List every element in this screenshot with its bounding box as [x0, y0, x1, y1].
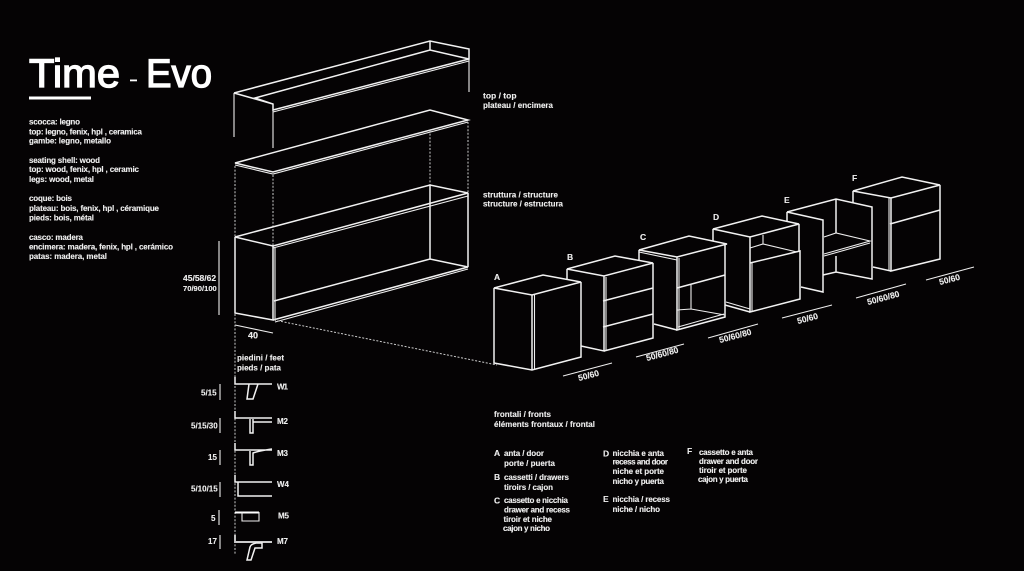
- module A: door: A: [494, 272, 500, 282]
- legend: D niche and door: nicchia e anta: [612, 449, 665, 458]
- legend: B drawers: [494, 472, 570, 492]
- module width dimensions: 50/60/80: [645, 345, 680, 363]
- legend: D niche and door: recess and door: [612, 458, 668, 466]
- module D: niche and door: [713, 212, 800, 312]
- dimension: depth: [235, 325, 273, 340]
- module width dimensions: [563, 267, 974, 383]
- foot W4: [191, 475, 290, 497]
- legend: C drawer and niche: cassetto e nicchia: [504, 496, 569, 505]
- module B: drawers: B: [567, 252, 573, 262]
- section labels: top and structure: structure / estructura: [483, 200, 564, 208]
- section labels: top and structure: struttura / structure: [483, 190, 559, 200]
- legend: E niche: nicchia / recess: [612, 495, 671, 504]
- text block: materials: top: wood, fenix, hpl , ceramic: [29, 165, 140, 174]
- foot W1: 5/15: [201, 388, 217, 398]
- foot W1: [201, 377, 289, 400]
- text block: materials: scocca: legno: [29, 118, 80, 126]
- heading: feet: pieds / pata: [237, 364, 282, 372]
- legend: D niche and door: nicho y puerta: [612, 477, 665, 486]
- module D: niche and door: D: [713, 212, 719, 222]
- heading: fronts: éléments frontaux / frontal: [494, 420, 595, 429]
- module E: niche: E: [784, 195, 790, 205]
- module C: drawer and niche: C: [640, 232, 646, 242]
- foot M7: [208, 535, 289, 560]
- legend: A door: anta / door: [504, 449, 544, 458]
- foot W4: W4: [277, 480, 290, 489]
- module width dimensions: 50/60/80: [718, 327, 753, 345]
- text block: materials: coque: bois: [29, 194, 73, 203]
- title: Time: [29, 52, 120, 96]
- legend: C drawer and niche: drawer and recess: [504, 506, 571, 514]
- legend: D niche and door: D: [603, 448, 609, 458]
- legend: C drawer and niche: C: [494, 496, 500, 506]
- text block: materials: seating shell: wood: [29, 156, 100, 165]
- legend: E niche: niche / nicho: [612, 505, 660, 514]
- text block: materials: [29, 118, 173, 261]
- module E: niche: [784, 195, 872, 292]
- module F: drawer and door: [852, 173, 940, 271]
- section labels: top and structure: top / top: [483, 90, 517, 100]
- module C: drawer and niche: [639, 232, 727, 330]
- foot W1: W1: [277, 382, 289, 392]
- heading: fronts: [494, 410, 595, 429]
- module width dimensions: 50/60: [796, 311, 819, 326]
- legend: B drawers: tiroirs / cajon: [504, 483, 553, 492]
- legend: B drawers: B: [494, 472, 500, 482]
- dashed guide lines: [235, 314, 497, 555]
- exploded unit: structure: [235, 110, 468, 322]
- section labels: top and structure: [483, 90, 564, 208]
- heading: feet: [237, 354, 284, 372]
- text block: materials: gambe: legno, metallo: [29, 136, 111, 146]
- section labels: top and structure: plateau / encimera: [483, 101, 554, 110]
- legend: A door: porte / puerta: [504, 459, 556, 468]
- foot M5: [211, 510, 290, 525]
- foot M7: M7: [277, 537, 289, 546]
- text block: materials: plateau: bois, fenix, hpl , céramique: [29, 204, 160, 213]
- legend: F drawer and door: cajon y puerta: [698, 475, 749, 484]
- foot M2: M2: [277, 417, 289, 426]
- foot M3: [208, 443, 289, 465]
- foot M2: [191, 411, 289, 433]
- foot M5: 5: [211, 514, 216, 523]
- foot W4: 5/10/15: [191, 484, 218, 494]
- text block: materials: pieds: bois, métal: [29, 214, 94, 222]
- module F: drawer and door: F: [852, 173, 857, 183]
- text block: materials: encimera: madera, fenix, hpl , cerámico: [29, 242, 173, 252]
- legend: C drawer and niche: cajon y nicho: [503, 524, 550, 533]
- text block: materials: casco: madera: [29, 233, 84, 242]
- heading: fronts: frontali / fronts: [494, 410, 552, 419]
- legend: B drawers: cassetti / drawers: [504, 473, 570, 482]
- foot M2: 5/15/30: [191, 422, 218, 430]
- legend: C drawer and niche: [494, 496, 571, 533]
- legend: F drawer and door: F: [687, 446, 692, 456]
- legend: E niche: E: [603, 494, 609, 504]
- legend: A door: [494, 448, 556, 468]
- heading: feet: piedini / feet: [237, 354, 284, 362]
- foot M3: M3: [277, 449, 289, 458]
- module width dimensions: 50/60: [938, 272, 961, 287]
- foot M7: 17: [208, 537, 217, 546]
- title: [29, 52, 212, 100]
- dimension: height: 70/90/100: [183, 284, 217, 293]
- text block: materials: patas: madera, metal: [29, 252, 107, 261]
- legend: D niche and door: niche et porte: [612, 467, 665, 476]
- text block: materials: legs: wood, metal: [29, 175, 94, 184]
- foot M5: M5: [278, 512, 290, 520]
- dimension: height: 45/58/62: [183, 273, 216, 283]
- module width dimensions: 50/60/80: [866, 289, 901, 307]
- legend: A door: A: [494, 448, 500, 458]
- module A: door: [494, 272, 581, 370]
- legend: F drawer and door: tiroir et porte: [699, 466, 748, 475]
- foot M3: 15: [208, 453, 217, 462]
- dimension: height: [183, 241, 219, 315]
- legend: F drawer and door: [687, 446, 758, 484]
- exploded unit: top: [234, 41, 469, 148]
- dimension: depth: 40: [248, 330, 258, 340]
- text block: materials: top: legno, fenix, hpl , ceramica: [29, 128, 143, 136]
- legend: F drawer and door: cassetto e anta: [699, 448, 754, 457]
- legend: F drawer and door: drawer and door: [699, 457, 758, 466]
- title: Evo: [146, 52, 212, 96]
- legend: C drawer and niche: tiroir et niche: [504, 515, 553, 524]
- legend: E niche: [603, 494, 671, 514]
- module width dimensions: 50/60: [577, 368, 600, 383]
- module B: drawers: [567, 252, 653, 351]
- legend: D niche and door: [603, 448, 668, 486]
